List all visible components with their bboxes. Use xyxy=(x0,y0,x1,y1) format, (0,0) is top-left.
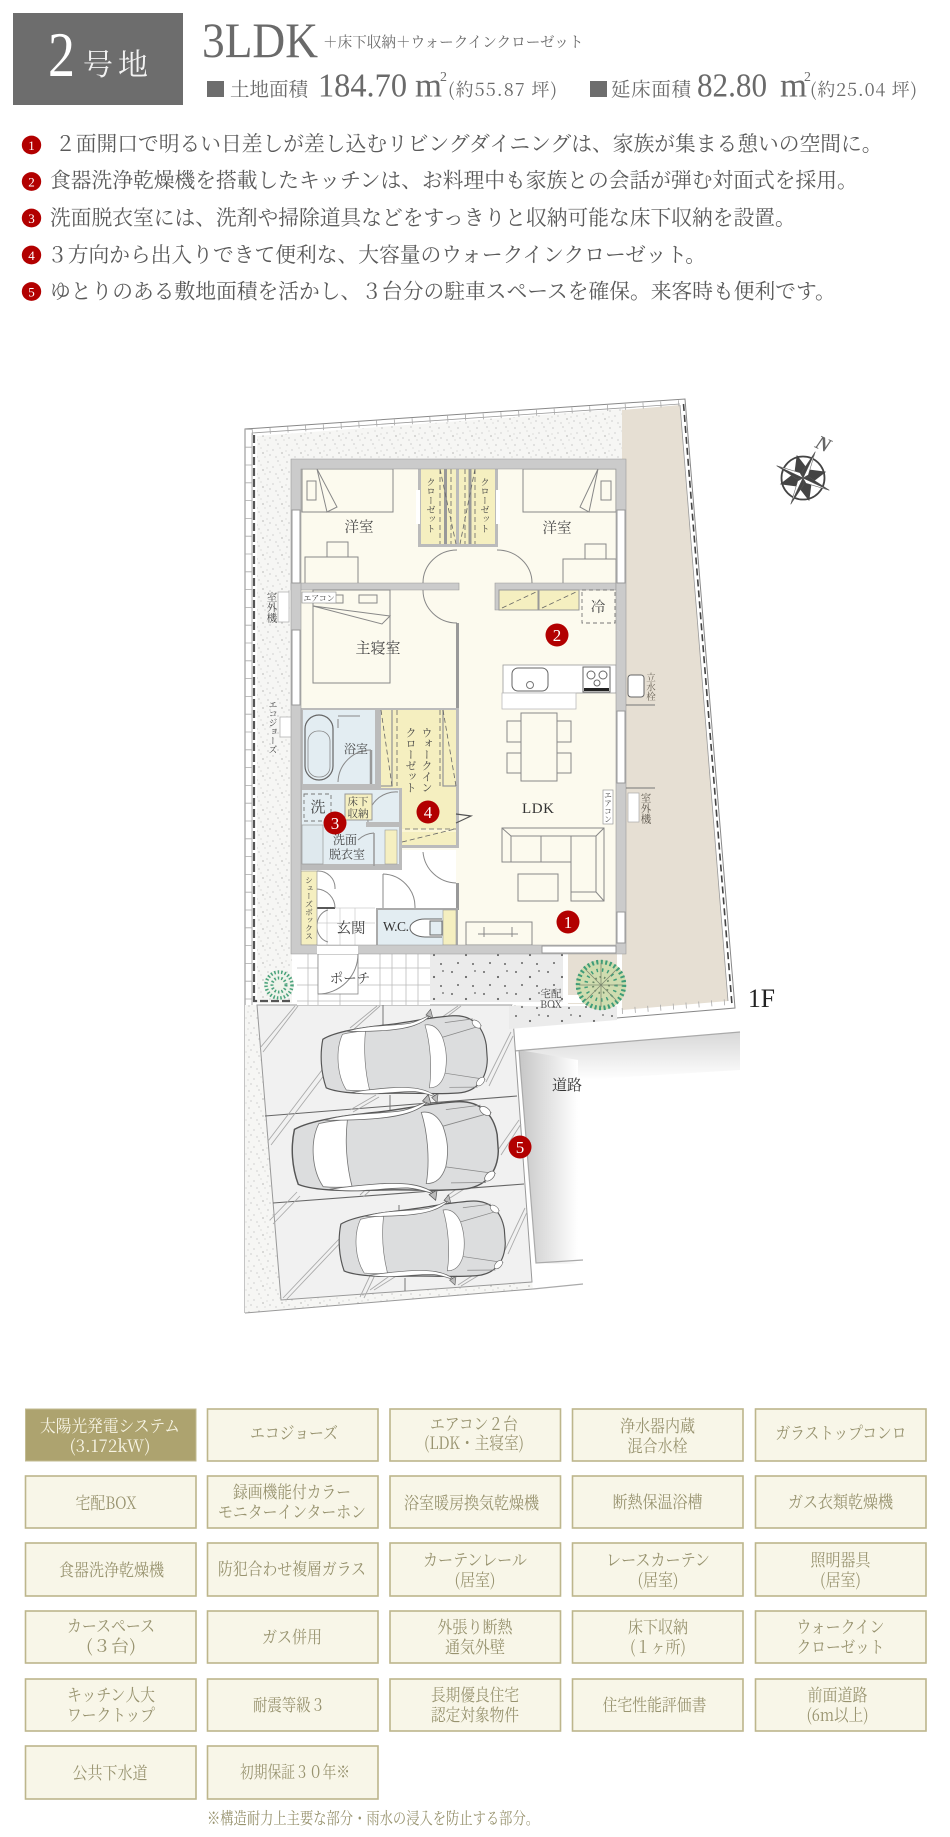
house floor plan xyxy=(291,459,626,954)
tag: walk-in closet: ウォークイン xyxy=(796,1613,884,1638)
toilet xyxy=(376,908,458,946)
closets: クローゼット xyxy=(478,477,492,533)
closets: クローゼット xyxy=(424,477,438,533)
feature 5: 5 xyxy=(28,284,35,300)
TV board xyxy=(466,922,532,945)
tag: bathroom dryer xyxy=(390,1476,560,1528)
tag: warranty xyxy=(208,1746,378,1799)
tag: warranty: 初期保証３０年※ xyxy=(240,1758,350,1783)
tag: gas: ガス併用 xyxy=(262,1623,322,1648)
feature 4: 4 xyxy=(28,248,35,263)
site plan: lot, yard and boundaries xyxy=(245,399,735,1313)
washroom: 洗面 xyxy=(333,831,357,848)
tag: water purifier xyxy=(572,1409,743,1461)
under-floor storage xyxy=(345,794,372,821)
feature 3: 3 xyxy=(28,211,35,226)
tag: air conditioners: (LDK・主寝室) xyxy=(424,1429,524,1454)
master bedroom: 主寝室 xyxy=(355,637,401,658)
porch label: ポーチ xyxy=(330,967,370,987)
kitchen upper cabinets and fridge xyxy=(495,583,616,623)
tag: underfloor storage xyxy=(572,1611,743,1663)
interior floor xyxy=(296,464,621,950)
footnote: ※構造耐力上主要な部分・雨水の浸入を防止する部分。 xyxy=(207,1805,539,1829)
closets xyxy=(416,469,500,547)
numbered markers on plan xyxy=(324,624,580,1158)
feature 2: 2 xyxy=(28,174,35,190)
tag: car space: (３台) xyxy=(86,1632,136,1657)
boundary block walls xyxy=(245,399,735,1313)
tag: walk-in closet: クローゼット xyxy=(796,1633,884,1658)
feature list xyxy=(22,127,883,304)
floor label: 1F: 1F xyxy=(748,984,775,1013)
tag: marble worktop xyxy=(26,1679,196,1731)
marker 4 xyxy=(416,800,440,824)
compass xyxy=(775,431,836,506)
tag: lace curtain: (居室) xyxy=(638,1566,678,1591)
tag: solar: 太陽光発電システム xyxy=(40,1412,180,1437)
tag: solar: (3.172kW) xyxy=(70,1432,150,1457)
tag: exterior insulation xyxy=(390,1611,560,1663)
tag: front road: 前面道路 xyxy=(808,1681,868,1706)
tag: exterior insulation: 通気外壁 xyxy=(445,1633,505,1658)
east bedroom: 洋室 xyxy=(542,517,572,538)
land area: 184.70 xyxy=(318,68,407,104)
marker 1 xyxy=(556,910,580,934)
tag: underfloor storage: (１ヶ所) xyxy=(630,1633,686,1658)
tag: eco-jozu xyxy=(208,1409,378,1461)
tag: lighting: (居室) xyxy=(820,1566,861,1591)
left outdoor unit: 室外機 xyxy=(264,590,280,623)
water tap: 立水栓 xyxy=(644,672,658,701)
tag: gas dryer xyxy=(756,1476,926,1528)
row 2 xyxy=(26,1476,926,1528)
tag: lace curtain: レースカーテン xyxy=(606,1546,710,1571)
entrance hall xyxy=(317,850,459,945)
tag: dishwasher: 食器洗浄乾燥機 xyxy=(59,1556,165,1581)
tag: curtain rail xyxy=(390,1543,560,1596)
total floor area: 延床面積 xyxy=(611,74,692,102)
title badge: 2号地: 2 xyxy=(48,20,75,90)
car 3 xyxy=(336,1191,508,1293)
tag: marble worktop: ワークトップ xyxy=(67,1701,155,1726)
compass: N xyxy=(811,431,836,458)
kitchen counter xyxy=(502,665,616,709)
left outdoor unit xyxy=(264,590,289,623)
water tap xyxy=(626,672,658,705)
heading: 3LDK plan type: ＋床下収納＋ウォークインクローゼット xyxy=(323,31,584,52)
dining table xyxy=(507,713,571,781)
coffee table xyxy=(518,874,558,901)
tag: car space: カースペース xyxy=(67,1612,155,1637)
marker 4: 4 xyxy=(424,803,433,822)
tag: long-life housing xyxy=(390,1679,560,1731)
toilet: W.C. xyxy=(383,919,409,934)
master bedroom xyxy=(291,583,459,683)
tag: exterior insulation: 外張り断熱 xyxy=(438,1613,513,1638)
land area: 2 xyxy=(440,70,447,85)
bathroom: 浴室 xyxy=(344,740,368,757)
tag: front road xyxy=(756,1679,926,1731)
tag: air conditioners xyxy=(390,1409,560,1461)
feature 4: ３方向から出入りできて便利な、大容量のウォークインクローゼット。 xyxy=(47,238,706,268)
tag: water purifier: 混合水栓 xyxy=(628,1432,688,1457)
delivery box label: 宅配 xyxy=(540,986,562,1001)
tag: eco-jozu: エコジョーズ xyxy=(250,1419,338,1444)
east bedroom xyxy=(523,469,616,586)
land area xyxy=(207,68,557,104)
gravel yard xyxy=(257,409,623,1003)
total floor area: 82.80 xyxy=(697,68,767,104)
LDK xyxy=(466,713,614,945)
windows xyxy=(292,510,625,954)
tag: gas xyxy=(208,1611,378,1663)
entrance hall: 玄関 xyxy=(336,917,366,938)
marker 3: 3 xyxy=(331,814,339,833)
tag: intercom: 録画機能付カラー xyxy=(233,1478,351,1503)
marker 1: 1 xyxy=(564,913,572,932)
tag: curtain rail: カーテンレール xyxy=(423,1546,527,1571)
right outdoor unit: 室外機 xyxy=(638,791,654,824)
tag: curtain rail: (居室) xyxy=(454,1566,496,1591)
tag: bathroom dryer: 浴室暖房換気乾燥機 xyxy=(404,1489,540,1514)
exterior walls xyxy=(291,459,626,954)
shrub: small xyxy=(264,970,294,1000)
tag: intercom xyxy=(208,1476,378,1528)
tag: marble worktop: キッチン人大 xyxy=(67,1681,155,1706)
tag: security glass xyxy=(208,1543,378,1596)
washroom: 脱衣室 xyxy=(329,846,365,862)
tag: lace curtain xyxy=(572,1543,743,1596)
total floor area: (約25.04 坪) xyxy=(810,76,917,102)
row 1 xyxy=(26,1409,926,1461)
carport with three cars xyxy=(245,1005,533,1313)
tag: glass top stove xyxy=(756,1409,926,1461)
dividing walls and doors xyxy=(423,550,532,710)
air conditioner: エアコン xyxy=(602,791,614,823)
master bedroom: エアコン xyxy=(303,593,335,604)
land area: m xyxy=(415,68,442,104)
tag: performance report xyxy=(572,1679,743,1731)
tag: delivery box xyxy=(26,1476,196,1528)
tag: performance report: 住宅性能評価書 xyxy=(602,1691,706,1716)
land area: 土地面積 xyxy=(230,74,309,102)
feature 3: 洗面脱衣室には、洗剤や掃除道具などをすっきりと収納可能な床下収納を設置。 xyxy=(50,201,796,231)
tag: gas dryer: ガス衣類乾燥機 xyxy=(788,1488,894,1513)
tag: seismic grade xyxy=(208,1679,378,1731)
heading: 3LDK plan type: 3LDK xyxy=(202,12,318,68)
total floor area xyxy=(590,68,917,104)
delivery box label: BOX xyxy=(540,997,563,1012)
feature 1: 1 xyxy=(28,138,35,153)
tag: front road: (6m以上) xyxy=(806,1701,868,1726)
road label: 道路 xyxy=(552,1074,582,1095)
feature 2: 食器洗浄乾燥機を搭載したキッチンは、お料理中も家族との会話が弾む対面式を採用。 xyxy=(50,164,858,194)
title badge: 2号地 xyxy=(13,13,183,105)
marker 5: 5 xyxy=(516,1138,524,1157)
marker 3 xyxy=(324,812,346,834)
bathroom xyxy=(301,708,380,788)
under-floor storage: 床下 xyxy=(348,794,369,809)
feature 5: ゆとりのある敷地面積を活かし、３台分の駐車スペースを確保。来客時も便利です。 xyxy=(50,274,836,304)
tag: air conditioners: エアコン２台 xyxy=(430,1410,518,1435)
tag: sewer xyxy=(26,1746,196,1799)
washroom xyxy=(301,788,402,870)
outdoor units and tap xyxy=(264,590,658,824)
porch and front gravel xyxy=(297,954,617,1029)
walk-in closet: ウォークイン xyxy=(419,727,435,793)
shoe box xyxy=(301,871,317,945)
tag: underfloor storage: 床下収納 xyxy=(628,1613,688,1638)
eco-jozu water heater: エコジョーズ xyxy=(266,700,280,754)
title badge: 2号地: 号地 xyxy=(83,40,148,84)
west bedroom xyxy=(302,469,393,584)
tag: walk-in closet xyxy=(756,1611,926,1663)
right outdoor unit xyxy=(626,788,655,824)
tag: dishwasher xyxy=(26,1543,196,1596)
total floor area: 2 xyxy=(804,70,811,85)
heading: 3LDK plan type xyxy=(202,12,584,68)
west bedroom: 洋室 xyxy=(344,516,374,537)
car 2 xyxy=(289,1090,501,1210)
kitchen upper cabinets and fridge: 冷 xyxy=(591,596,606,617)
marker 2: 2 xyxy=(553,626,561,645)
road xyxy=(514,1032,740,1289)
row 5 xyxy=(26,1679,926,1731)
feature 1: ２面開口で明るい日差しが差し込むリビングダイニングは、家族が集まる憩いの空間に。 xyxy=(55,127,883,157)
under-floor storage: 収納 xyxy=(348,806,369,821)
total floor area: m xyxy=(780,68,807,104)
tag: seismic grade: 耐震等級３ xyxy=(253,1691,325,1716)
delivery box label xyxy=(540,986,563,1012)
tag: sewer: 公共下水道 xyxy=(72,1759,148,1784)
door from closet to LDK xyxy=(456,814,471,823)
sofa xyxy=(502,828,604,901)
tag: insulated tub xyxy=(572,1476,743,1528)
tag: delivery box: 宅配BOX xyxy=(76,1489,137,1514)
shrub: large xyxy=(576,960,626,1010)
row 4 xyxy=(26,1611,926,1663)
eco-jozu water heater xyxy=(266,700,291,754)
marker 5 xyxy=(508,1136,532,1158)
row 3 xyxy=(26,1543,926,1596)
shoe box: シューズボックス xyxy=(304,876,314,940)
tag: insulated tub: 断熱保温浴槽 xyxy=(612,1488,702,1513)
equipment grid xyxy=(26,1409,926,1799)
washroom: 洗 xyxy=(310,796,326,817)
car 1 xyxy=(318,1006,490,1110)
marker 2 xyxy=(546,624,568,646)
tag: lighting: 照明器具 xyxy=(810,1546,871,1571)
tag: long-life housing: 長期優良住宅 xyxy=(431,1681,519,1706)
side yard xyxy=(622,405,728,1010)
tag: car space xyxy=(26,1611,196,1663)
walk-in closet xyxy=(379,708,459,848)
row 6 xyxy=(26,1746,378,1799)
walk-in closet: クローゼット xyxy=(403,727,419,793)
tag: intercom: モニターインターホン xyxy=(218,1498,366,1523)
land area: (約55.87 坪) xyxy=(448,76,557,102)
tag: solar xyxy=(26,1409,196,1461)
tag: glass top stove: ガラストップコンロ xyxy=(776,1419,906,1444)
tag: security glass: 防犯合わせ複層ガラス xyxy=(218,1555,366,1580)
tag: long-life housing: 認定対象物件 xyxy=(431,1701,519,1726)
tag: lighting xyxy=(756,1543,926,1596)
LDK label: LDK xyxy=(522,801,554,817)
tag: water purifier: 浄水器内蔵 xyxy=(620,1412,695,1437)
